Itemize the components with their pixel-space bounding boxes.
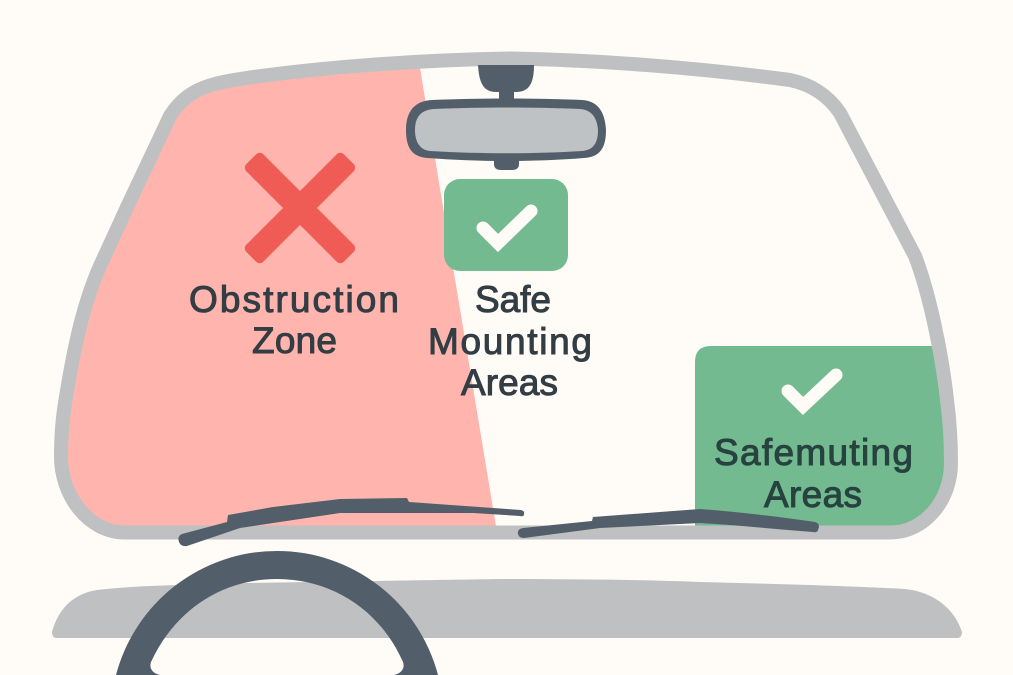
- left wiper: [178, 498, 524, 546]
- label: Safe Mounting Areas: [428, 279, 592, 403]
- icon: corner check: [788, 375, 836, 406]
- dashboard: [52, 579, 962, 638]
- right wiper: [518, 509, 819, 538]
- mirror glass: [415, 108, 598, 153]
- label: Safemuting Areas: Areas: [764, 474, 862, 515]
- label: Safe Mounting Areas: Safe: [475, 279, 551, 320]
- mirror housing: [406, 98, 606, 161]
- label: Obstruction Zone: [189, 279, 399, 361]
- panel: obstruction zone fill: [68, 68, 496, 526]
- panel: safe corner area fill: [695, 346, 944, 526]
- label: Safemuting Areas: [714, 432, 913, 515]
- label: Safe Mounting Areas: Areas: [461, 362, 558, 403]
- label: Safemuting Areas: Safemuting: [714, 432, 913, 473]
- steering wheel: [116, 551, 438, 675]
- icon: red cross: [243, 151, 357, 265]
- icon: green check badge: [444, 179, 568, 271]
- mirror mount: [478, 65, 534, 101]
- mirror bottom tab: [494, 156, 519, 170]
- windshield frame: [61, 58, 951, 532]
- rearview mirror: [406, 65, 606, 170]
- label: Obstruction Zone: Zone: [252, 320, 337, 361]
- label: Safe Mounting Areas: Mounting: [428, 321, 592, 362]
- label: Obstruction Zone: Obstruction: [189, 279, 399, 320]
